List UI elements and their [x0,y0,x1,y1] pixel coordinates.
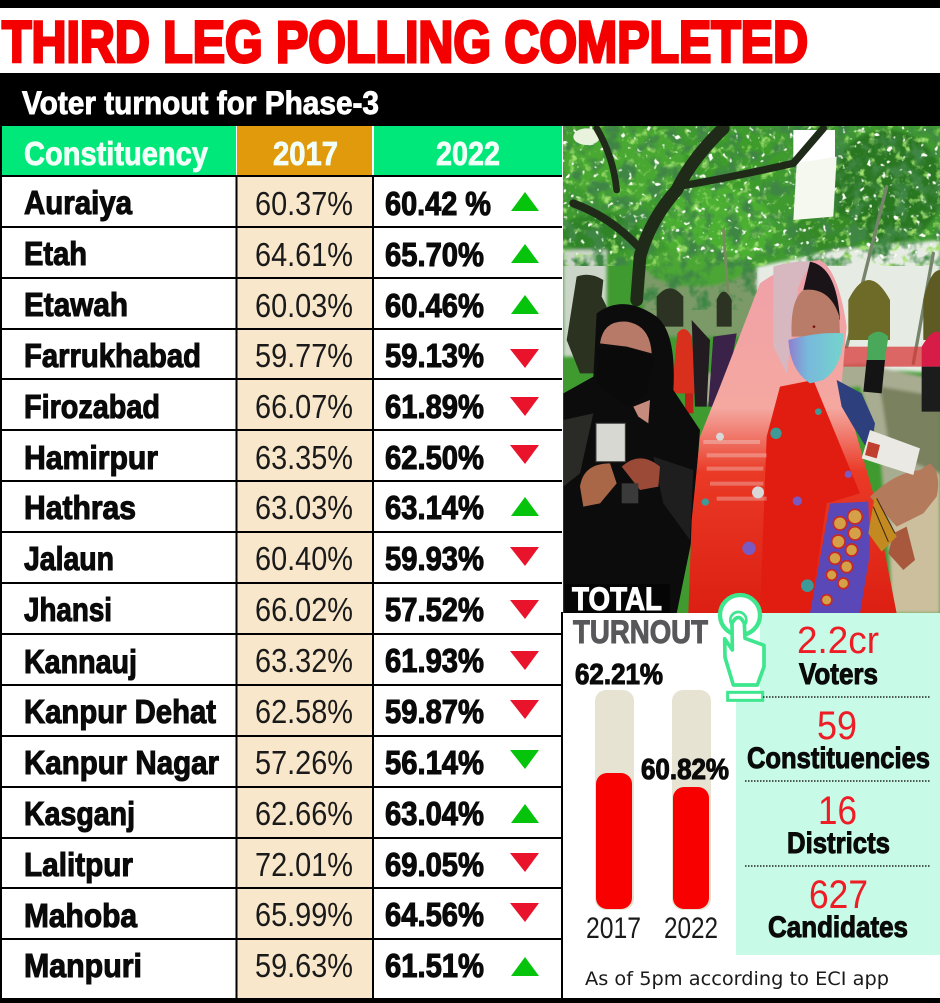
row: Jalaun [24,541,539,578]
stat: voters: Voters [799,658,878,691]
frame rule left of lower panel [561,612,563,1000]
heading: turnout: TURNOUT [573,614,708,650]
icon: hand pressing voting button [720,595,764,700]
row: Lalitpur [24,847,539,884]
value 2017: 62.21% [575,659,663,691]
row: Manpuri: 61.51% [385,948,484,985]
row: Jalaun: 59.93% [385,541,484,578]
row: Hathras: 63.03% [255,490,353,527]
row: Farrukhabad: 59.13% [385,338,484,375]
axis label 2022: 2022 [664,912,718,945]
row: Jalaun: 60.40% [255,541,353,578]
row: Kanpur Nagar: 56.14% [385,745,484,782]
row: Mahoba: Mahoba [24,898,137,935]
row: Lalitpur: 69.05% [385,847,484,884]
row: Jhansi: 57.52% [385,592,484,629]
row: Kasganj: 62.66% [255,796,353,833]
row: Firozabad: 61.89% [385,389,484,426]
table header row: 2017 [273,136,338,173]
panel: total turnout [563,595,940,998]
row: Hathras: Hathras [24,490,136,527]
row: Hamirpur [24,440,539,477]
row: Auraiya: 60.42 % [385,186,491,223]
table: voter turnout by constituency [0,126,562,1000]
row: Etah [24,236,539,274]
source note: As of 5pm according to ECI app [585,968,889,990]
stat: candidates [768,873,908,944]
table header row: 2022 [436,136,500,173]
row: Hathras [24,490,539,527]
row: Auraiya [24,185,539,223]
row: Manpuri: 59.63% [255,948,353,985]
bar 2022 [672,690,711,910]
row: Etawah [24,287,539,325]
row: Kanpur Dehat: Kanpur Dehat [24,694,216,731]
stat: districts [787,789,890,860]
row: Jhansi: Jhansi [24,592,112,629]
row: Kanpur Nagar [24,745,539,782]
row: Mahoba [24,897,539,935]
row: Firozabad: 66.07% [255,389,353,426]
stat: candidates: 627 [809,873,868,917]
row: Hamirpur: 63.35% [255,440,353,477]
row: Farrukhabad [24,338,539,375]
row: Etawah: 60.46% [385,288,484,325]
row: Firozabad [24,389,539,426]
row: Kasganj: 63.04% [385,796,484,833]
row: Jalaun: Jalaun [24,541,114,578]
row: Kanpur Nagar: 57.26% [255,745,353,782]
table header row [2,126,562,176]
stat: candidates: Candidates [768,911,908,944]
title: THIRD LEG POLLING COMPLETED [2,10,808,75]
bar chart: 2017 vs 2022 turnout [575,659,729,945]
value 2022: 60.82% [641,754,729,786]
stat: voters [797,620,879,691]
mint stats background [736,613,940,955]
bottom black rule [0,998,940,1003]
stat: districts: Districts [787,827,890,860]
row: Kannauj: 61.93% [385,643,484,680]
row: Etah: Etah [24,236,87,273]
photo label box [565,584,670,614]
row: Kanpur Nagar: Kanpur Nagar [24,745,219,782]
heading: total: TOTAL [572,581,662,617]
row: Jhansi [24,592,539,629]
row: Auraiya: 60.37% [255,186,353,223]
row: Farrukhabad: Farrukhabad [24,338,201,375]
row: Kanpur Dehat: 59.87% [385,694,484,731]
row: Etah: 65.70% [385,237,484,274]
row: Etawah: Etawah [24,287,128,324]
row: Mahoba: 65.99% [255,897,353,934]
row: Kannauj: Kannauj [24,644,137,681]
stat: constituencies [747,704,930,775]
row: Hamirpur: Hamirpur [24,440,158,477]
table header row: Constituency [24,136,208,173]
row: Kasganj [24,796,539,833]
top black rule [0,0,940,8]
woman in red with veil and mask [688,260,938,613]
row: Etawah: 60.03% [255,288,353,325]
stat: voters: 2.2cr [797,620,879,662]
axis label 2017: 2017 [586,912,641,945]
subtitle band [0,73,940,126]
row: Hamirpur: 62.50% [385,440,484,477]
stat: districts: 16 [818,789,857,833]
stat: constituencies: 59 [817,704,857,748]
row: Hathras: 63.14% [385,490,484,527]
row: Kanpur Dehat: 62.58% [255,694,353,731]
row: Manpuri: Manpuri [24,948,142,985]
row: Farrukhabad: 59.77% [255,338,353,375]
row: Kannauj [24,643,539,681]
row: Firozabad: Firozabad [24,389,160,426]
subtitle text: Voter turnout for Phase-3 [22,85,379,121]
row: Mahoba: 64.56% [385,897,484,934]
row: Lalitpur: 72.01% [255,847,353,884]
woman in black [563,304,700,613]
row: Manpuri [24,948,539,985]
row: Kasganj: Kasganj [24,796,135,833]
row: Lalitpur: Lalitpur [24,847,133,884]
row: Etah: 64.61% [255,237,353,274]
row: Kanpur Dehat [24,694,539,731]
photo: two women voters showing ID cards under trees [560,126,940,614]
bar 2017 [595,690,634,910]
row: Jhansi: 66.02% [255,592,353,629]
row: Kannauj: 63.32% [255,643,353,680]
row: Auraiya: Auraiya [24,185,132,222]
